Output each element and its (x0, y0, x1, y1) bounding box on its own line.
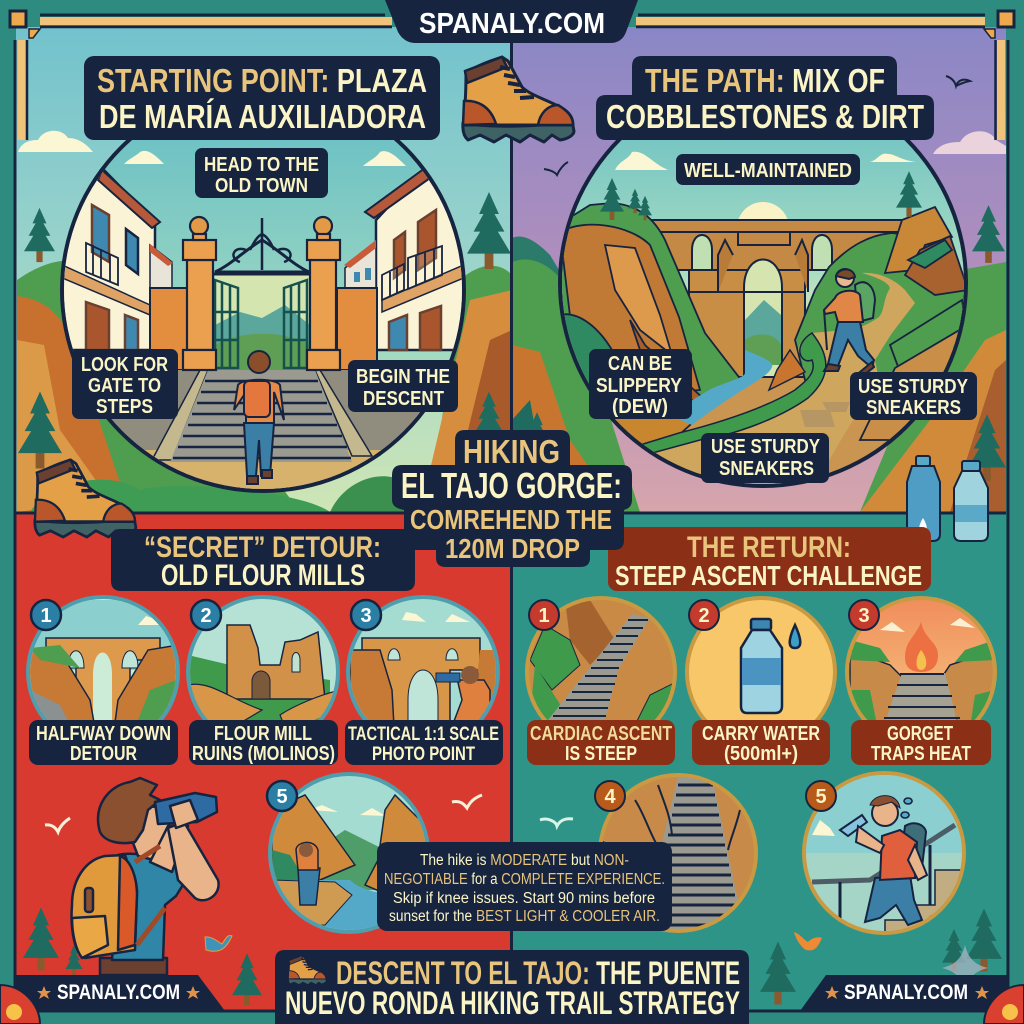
return label 1: IS STEEP (565, 743, 637, 765)
label: well-maintained: WELL-MAINTAINED (684, 160, 852, 182)
tree right (467, 192, 511, 269)
return badge 1: 1 (538, 605, 550, 627)
heading: the return: THE RETURN: (687, 531, 851, 564)
label: sturdy sneakers right: SNEAKERS (866, 397, 961, 419)
tree far right (972, 205, 1005, 263)
central title: COMREHEND THE (410, 504, 612, 535)
corner ornament right (984, 11, 1014, 38)
tree lower left (524, 412, 550, 458)
detour label 3: PHOTO POINT (372, 744, 475, 765)
tree lower left (18, 392, 62, 468)
return badge 5 (806, 781, 836, 811)
label: look for gate: LOOK FOR (81, 354, 168, 376)
panel: the path (512, 27, 1006, 513)
heading: the return: STEEP ASCENT CHALLENGE (615, 560, 922, 591)
label: look for gate (72, 349, 178, 419)
detour circle 1 (26, 595, 180, 720)
detour tree small (65, 945, 83, 975)
detour label 2: FLOUR MILL (214, 723, 312, 745)
return label 1: CARDIAC ASCENT (530, 723, 672, 745)
circle scene: the path (558, 140, 968, 488)
trail (645, 273, 915, 490)
return badge 5: 5 (815, 786, 827, 808)
heading: secret detour: OLD FLOUR MILLS (161, 559, 365, 592)
icon: sun left corner (0, 985, 40, 1024)
detour trees (23, 908, 59, 970)
label: head to the old town: HEAD TO THE (204, 154, 319, 176)
label: head to the old town: OLD TOWN (215, 175, 308, 197)
detour label 2 (189, 720, 338, 765)
detour badge 2: 2 (200, 605, 212, 627)
tree lower right (968, 414, 1006, 481)
return label 2: CARRY WATER (702, 723, 820, 745)
bridge (652, 220, 902, 377)
walking hiker (824, 269, 875, 375)
return circle 5 (804, 773, 965, 935)
icon: sun right corner (984, 985, 1024, 1024)
tree lower right (474, 392, 504, 444)
panel title: the path: THE PATH: MIX OF (645, 62, 885, 99)
detour badge 1 (31, 600, 61, 630)
central title (392, 430, 632, 567)
pillars (183, 217, 340, 370)
label: sturdy sneakers right (850, 372, 977, 420)
detour badge 2 (191, 600, 221, 630)
return label 3 (851, 720, 991, 765)
footer title: DESCENT TO EL TAJO: THE PUENTE (336, 955, 740, 991)
tree by footer (232, 953, 262, 1006)
heading: secret detour (111, 529, 415, 592)
label: sturdy sneakers bottom: USE STURDY (711, 436, 821, 458)
bird: return (540, 819, 573, 826)
return label 1 (527, 720, 675, 765)
callout: NEGOTIABLE for a COMPLETE EXPERIENCE. (384, 871, 665, 888)
bird blue (205, 935, 232, 951)
return badge 2: 2 (698, 605, 710, 627)
panel: secret detour (16, 513, 512, 1010)
detour badge 5: 5 (276, 786, 288, 808)
label: can be slippery (589, 349, 692, 419)
birds (946, 76, 970, 86)
detour badge 3: 3 (360, 605, 372, 627)
detour label 3: TACTICAL 1:1 SCALE (348, 724, 499, 745)
callout: The hike is MODERATE but NON- (420, 852, 629, 869)
footer badge left (15, 975, 225, 1011)
return badge 4 (595, 781, 625, 811)
footer badge right (800, 975, 1008, 1011)
label: can be slippery: SLIPPERY (596, 375, 683, 397)
bird orange (794, 932, 822, 950)
label: look for gate: STEPS (96, 396, 153, 418)
icon: left boot (35, 460, 136, 537)
return badge 1 (529, 600, 559, 630)
right hill (795, 207, 968, 440)
label: begin the descent: BEGIN THE (356, 366, 450, 388)
central title: EL TAJO GORGE: (401, 465, 622, 506)
detour circle 3 (346, 595, 500, 720)
clouds (124, 151, 406, 166)
footer badge right: SPANALY.COM (844, 981, 968, 1004)
return label 2: (500ml+) (724, 743, 798, 765)
tree (23, 908, 59, 970)
detour badge 5 (267, 781, 297, 811)
heading: secret detour: “SECRET” DETOUR: (144, 531, 381, 564)
plaza (112, 370, 420, 489)
icon: water bottle blue (907, 456, 940, 541)
tree (628, 189, 642, 213)
corner ornament left (10, 11, 40, 38)
footer title: NUEVO RONDA HIKING TRAIL STRATEGY (285, 985, 740, 1021)
stairs (152, 370, 372, 462)
return label 3: TRAPS HEAT (871, 743, 971, 765)
footer title (275, 950, 749, 1024)
detour label 1: HALFWAY DOWN (36, 723, 171, 745)
detour label 3 (345, 720, 503, 765)
gate (214, 218, 310, 368)
return badge 3 (849, 600, 879, 630)
return circle 4 (600, 775, 756, 935)
bottle icon (741, 619, 800, 713)
footer badge left: SPANALY.COM (57, 981, 180, 1004)
label: sturdy sneakers bottom: SNEAKERS (719, 458, 814, 480)
sparkle watermark (942, 945, 988, 990)
binocular hiker (72, 778, 219, 975)
return label 2 (692, 720, 830, 765)
river (668, 350, 772, 425)
detour badge 3 (351, 600, 381, 630)
right building (376, 168, 466, 350)
label: can be slippery: CAN BE (608, 353, 672, 375)
return label 3: GORGET (887, 723, 953, 745)
central title: HIKING (463, 433, 560, 470)
detour circle 2 (186, 595, 340, 720)
label: look for gate: GATE TO (88, 375, 161, 397)
cloud left (18, 131, 93, 152)
walls (150, 288, 188, 370)
tree left (24, 208, 55, 262)
label: head to the old town (195, 148, 328, 198)
icon: small boot (288, 956, 326, 985)
tree right 1 (942, 929, 966, 971)
detour label 1 (29, 720, 178, 765)
left cliff (562, 202, 740, 454)
panel title: the path: COBBLESTONES & DIRT (606, 98, 924, 135)
birds: detour (45, 795, 482, 832)
label: sturdy sneakers bottom (701, 433, 829, 483)
circle scene: starting point (60, 140, 466, 493)
panel title: starting point: DE MARÍA AUXILIADORA (99, 98, 426, 135)
return circle 3 (845, 596, 997, 720)
return circle 2 (687, 598, 835, 746)
panel: the return (512, 513, 1006, 1010)
cloud right (933, 131, 1006, 154)
label: can be slippery: (DEW) (612, 396, 668, 418)
tree right 2 (966, 908, 1002, 972)
callout (377, 842, 672, 931)
icon: water bottle clear (954, 461, 988, 541)
detour circle 5 (270, 774, 430, 935)
label: sturdy sneakers right: USE STURDY (858, 376, 969, 398)
central title: 120M DROP (445, 533, 580, 564)
callout: sunset for the BEST LIGHT & COOLER AIR. (389, 908, 660, 925)
top badge (385, 0, 638, 43)
tree (896, 171, 922, 217)
return badge 3: 3 (858, 605, 870, 627)
label: begin the descent: DESCENT (363, 388, 444, 410)
hiker on stairs (234, 351, 284, 484)
heading: the return (608, 527, 931, 591)
panel title: the path (596, 56, 934, 140)
detour label 2: RUINS (MOLINOS) (192, 743, 335, 765)
return badge 4: 4 (604, 786, 616, 808)
callout: Skip if knee issues. Start 90 mins before (393, 890, 655, 907)
top badge: SPANALY.COM (419, 8, 605, 40)
trees: return (760, 942, 796, 1004)
return circle 1 (525, 596, 677, 720)
panel: starting point (16, 27, 512, 513)
tree (638, 196, 652, 220)
label: begin the descent (348, 360, 458, 412)
panel title: starting point (84, 56, 440, 140)
icon: top boot (463, 57, 574, 142)
detour badge 1: 1 (40, 605, 52, 627)
detour label 1: DETOUR (70, 743, 137, 765)
left building (60, 168, 155, 350)
panel title: starting point: STARTING POINT: PLAZA (97, 62, 427, 99)
trees (600, 178, 624, 220)
label: well-maintained (676, 154, 860, 185)
return badge 2 (689, 600, 719, 630)
